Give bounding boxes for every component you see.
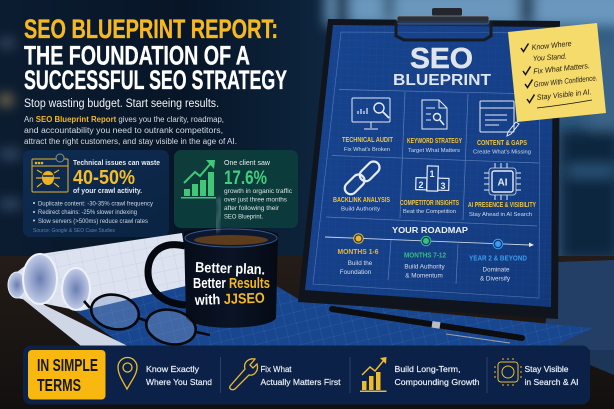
card: AI presence and visibility: AI <box>498 178 508 188</box>
board heading: BLUEPRINT <box>393 72 491 89</box>
roadmap step: months 7-12: MONTHS 7-12 <box>404 252 446 260</box>
badge: in simple terms: TERMS <box>37 375 81 395</box>
icon: green growth chart <box>181 160 216 198</box>
roadmap step: months 1-6: Foundation <box>340 269 372 276</box>
note checklist <box>521 44 592 108</box>
item: build long-term compounding growth <box>360 357 480 392</box>
card: backlink analysis: BACKLINK ANALYSIS <box>333 195 390 204</box>
item: fix what actually matters first <box>230 359 341 390</box>
title: SEO BLUEPRINT REPORT: <box>24 14 278 44</box>
eyeglasses <box>84 290 210 349</box>
item: know exactly where you stand <box>118 358 212 389</box>
roadmap step: year 2 and beyond: YEAR 2 & BEYOND <box>469 256 527 262</box>
roadmap timeline arrow <box>325 234 534 249</box>
roadmap step: year 2 and beyond <box>469 256 527 282</box>
title: SUCCESSFUL SEO STRATEGY <box>24 65 287 95</box>
crawl stat text <box>73 158 160 195</box>
badge: in simple terms <box>28 350 106 400</box>
card: AI presence and visibility: Stay Ahead in AI Search <box>469 212 532 218</box>
title <box>24 14 287 95</box>
sticky note: You Stand. <box>533 52 567 63</box>
roadmap heading: YOUR ROADMAP <box>392 225 468 235</box>
blueprint rolls <box>8 233 190 311</box>
panel: crawl waste stat <box>23 150 169 237</box>
growth stat text: One client saw <box>224 158 271 167</box>
crawl bullet list: Duplicate content: -30-35% crawl frequency <box>38 200 154 208</box>
item: know exactly where you stand: Where You Stand <box>146 377 212 387</box>
card: competitor insights: COMPETITOR INSIGHTS <box>400 198 459 207</box>
roadmap step: months 1-6: MONTHS 1-6 <box>338 249 379 256</box>
sticky note: Grow With Confidence. <box>533 73 598 89</box>
clipboard <box>298 8 560 319</box>
metal clip <box>396 8 491 40</box>
mug text <box>193 260 270 309</box>
pen <box>332 309 522 343</box>
item: stay visible in search and AI: in Search & AI <box>524 377 578 387</box>
growth stat text: over just three months <box>224 196 288 204</box>
card: technical audit: Fix What's Broken <box>344 147 390 153</box>
bottom banner: in simple terms <box>23 346 590 404</box>
card: keyword strategy: Target What Matters <box>408 148 460 154</box>
card: competitor insights: Beat the Competition <box>403 209 456 215</box>
board heading <box>393 43 491 89</box>
sticky note <box>508 23 606 122</box>
crawl bullet list <box>33 200 154 225</box>
roadmap step: months 1-6: Build the <box>348 260 373 267</box>
growth stat text: 17.6% <box>224 168 267 189</box>
item: fix what actually matters first: Fix What <box>260 364 292 374</box>
card: keyword strategy: KEYWORD STRATEGY <box>407 136 462 145</box>
intro paragraph: attract the right customers, and stay visible in the age of AI. <box>24 137 237 146</box>
item: build long-term compounding growth: Build Long-Term, <box>394 364 460 374</box>
coffee mug <box>148 228 278 328</box>
roadmap step: year 2 and beyond: & Diversify <box>480 276 511 282</box>
roadmap step: year 2 and beyond: Dominate <box>483 266 510 274</box>
card: competitor insights: 3 <box>440 181 446 191</box>
sticky note: Stay Visible in AI. <box>536 87 592 102</box>
growth stat text: growth in organic traffic <box>224 188 293 195</box>
card: competitor insights <box>400 166 459 215</box>
roadmap step: months 1-6 <box>338 249 379 276</box>
crawl bullet list: Redirect chains: -25% slower indexing <box>38 209 137 216</box>
card: technical audit <box>342 98 393 153</box>
steam <box>216 198 221 232</box>
card: content and gaps <box>473 101 531 156</box>
icon: browser with bug <box>32 154 68 192</box>
mug text: Better Results <box>193 276 270 292</box>
panel: client growth stat <box>174 150 298 228</box>
sticky note: Fix What Matters. <box>533 61 590 76</box>
intro paragraph <box>24 115 237 146</box>
crawl stat text: 40-50% <box>73 167 135 189</box>
item: know exactly where you stand: Know Exactly <box>146 364 200 374</box>
mug text: with JJSEO <box>194 291 265 309</box>
roadmap step: months 7-12: & Momentum <box>405 272 443 280</box>
board heading: SEO <box>410 43 473 75</box>
crawl stat text: of your crawl activity. <box>73 186 142 195</box>
growth stat text: after following their <box>224 205 280 212</box>
card: content and gaps: CONTENT & GAPS <box>477 138 527 147</box>
icon: rising bar chart <box>360 357 386 392</box>
subtitle: Stop wasting budget. Start seeing results. <box>24 96 219 110</box>
card: backlink analysis <box>333 159 390 212</box>
item: fix what actually matters first: Actually Matters First <box>260 377 341 387</box>
intro paragraph: and accountability you need to outrank competitors, <box>24 126 223 135</box>
mug handle <box>148 245 186 305</box>
item: stay visible in search and AI <box>494 358 578 387</box>
card: backlink analysis: Build Authority <box>341 206 380 212</box>
sticky note: Know Where <box>531 39 572 52</box>
icon: location pin <box>118 358 137 389</box>
card: technical audit: TECHNICAL AUDIT <box>342 135 393 144</box>
icon: wrench <box>230 359 257 390</box>
card: content and gaps: Create What's Missing <box>473 150 531 156</box>
growth stat text: SEO Blueprint. <box>224 214 263 220</box>
blueprint sheet <box>305 25 553 307</box>
title: THE FOUNDATION OF A <box>24 40 250 70</box>
card: competitor insights: 2 <box>418 180 424 190</box>
roadmap step: months 7-12: Build Authority <box>404 264 445 270</box>
icon: AI chip <box>494 358 522 386</box>
card: competitor insights: 1 <box>429 169 435 179</box>
intro paragraph: An SEO Blueprint Report gives you the clarity, roadmap, <box>24 115 224 124</box>
roadmap step: months 7-12 <box>404 252 446 280</box>
item: stay visible in search and AI: Stay Visible <box>524 364 569 374</box>
growth stat text <box>224 158 293 220</box>
crawl stat text: Technical issues can waste <box>73 158 160 167</box>
card: AI presence and visibility: AI PRESENCE & VISIBILITY <box>468 202 536 209</box>
card: AI presence and visibility <box>468 163 536 218</box>
badge: in simple terms: IN SIMPLE <box>37 355 98 375</box>
mug text: Better plan. <box>195 260 265 278</box>
item: build long-term compounding growth: Compounding Growth <box>394 377 480 387</box>
source note: Source: Google & SEO Case Studies <box>33 228 115 234</box>
card: keyword strategy <box>407 100 462 154</box>
crawl bullet list: Slow servers (>500ms) reduce crawl rates <box>38 218 148 225</box>
